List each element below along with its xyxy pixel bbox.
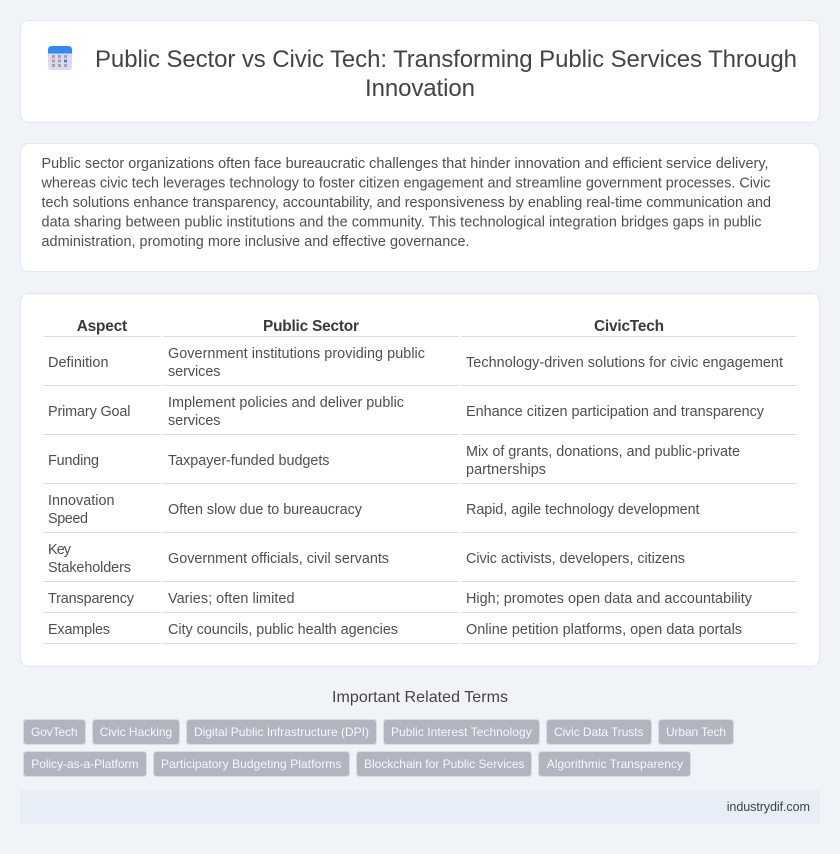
intro paragraph: data sharing between public institutions and the community. This technological integration bridges gaps in public	[42, 214, 762, 230]
row: Key Stakeholders: Stakeholders	[48, 560, 131, 576]
panel: introduction text	[20, 144, 820, 272]
tag: Urban Tech: Urban Tech	[666, 725, 726, 739]
panel: comparison table	[20, 294, 820, 666]
tag: Civic Data Trusts	[546, 720, 652, 744]
tag: Digital Public Infrastructure: Digital Public Infrastructure (DPI)	[194, 725, 369, 739]
table header row	[43, 318, 797, 337]
intro paragraph: tech solutions enhance transparency, accountability, and responsiveness by enabling real-time communication and	[42, 195, 771, 211]
row: Innovation Speed: Speed	[48, 511, 88, 527]
heading: related terms: Important Related Terms	[332, 689, 508, 706]
tag: Public Interest Technology	[384, 720, 540, 744]
tag: GovTech: GovTech	[31, 725, 78, 739]
row: Key Stakeholders: Government officials, civil servants	[168, 551, 389, 567]
tag: Policy-as-a-Platform	[24, 752, 146, 776]
row: Innovation Speed: Rapid, agile technology development	[466, 502, 700, 518]
table header row: Public Sector	[263, 318, 359, 335]
row: Primary Goal: services	[168, 413, 220, 429]
title	[95, 46, 797, 102]
tag: Civic Data Trusts: Civic Data Trusts	[554, 725, 644, 739]
row: Examples	[43, 622, 797, 644]
row: Definition: Government institutions providing public	[168, 346, 425, 362]
intro paragraph: administration, promoting more inclusive and effective governance.	[42, 234, 470, 250]
intro paragraph: Public sector organizations often face bureaucratic challenges that hinder innovation and efficient service delivery,	[42, 156, 768, 172]
footer source text: industrydif.com	[727, 800, 810, 814]
row: Funding: partnerships	[466, 462, 546, 478]
row: Primary Goal: Primary Goal	[48, 404, 130, 420]
row: Examples: City councils, public health agencies	[168, 622, 398, 638]
row: Funding	[43, 444, 797, 484]
tag: Blockchain for Public Services: Blockchain for Public Services	[364, 757, 524, 771]
row: Definition: Definition	[48, 355, 108, 371]
tag: Policy-as-a-Platform: Policy-as-a-Platform	[31, 757, 138, 771]
tag: Digital Public Infrastructure	[186, 720, 376, 744]
row: Transparency: Varies; often limited	[168, 591, 294, 607]
row: Definition	[43, 346, 797, 386]
table header row: Aspect	[77, 318, 127, 335]
row: Funding: Funding	[48, 453, 99, 469]
row: Key Stakeholders	[43, 542, 797, 582]
row: Primary Goal: Enhance citizen participation and transparency	[466, 404, 765, 420]
row: Transparency: High; promotes open data and accountability	[466, 591, 753, 607]
row: Definition: services	[168, 364, 220, 380]
title: Public Sector vs Civic Tech: Transforming Public Services Through	[95, 46, 797, 73]
panel: title header	[20, 20, 820, 122]
row: Innovation Speed: Innovation	[48, 493, 114, 509]
tag: Civic Hacking: Civic Hacking	[100, 725, 172, 739]
row: Transparency: Transparency	[48, 591, 135, 607]
tag: Participatory Budgeting Platforms: Participatory Budgeting Platforms	[161, 757, 342, 771]
title: Innovation	[365, 75, 475, 102]
footer bar	[20, 790, 820, 824]
row: Examples: Examples	[48, 622, 110, 638]
row: Transparency	[43, 591, 797, 613]
row: Primary Goal	[43, 395, 797, 435]
row: Examples: Online petition platforms, open data portals	[466, 622, 742, 638]
intro paragraph	[40, 156, 771, 250]
row: Innovation Speed	[43, 493, 797, 533]
tag: Participatory Budgeting Platforms	[154, 752, 350, 776]
icon: calendar app	[48, 46, 72, 70]
row: Funding: Mix of grants, donations, and public-private	[466, 444, 740, 460]
table header row: CivicTech	[594, 318, 664, 335]
row: Funding: Taxpayer-funded budgets	[168, 453, 330, 469]
tag: Blockchain for Public Services	[356, 752, 532, 776]
tag: Algorithmic Transparency: Algorithmic Transparency	[547, 757, 683, 771]
tag: Public Interest Technology: Public Interest Technology	[391, 725, 532, 739]
row: Key Stakeholders: Key	[48, 542, 72, 558]
row: Key Stakeholders: Civic activists, developers, citizens	[466, 551, 685, 567]
tag: GovTech	[24, 720, 86, 744]
tag: Civic Hacking	[92, 720, 180, 744]
row: Innovation Speed: Often slow due to bureaucracy	[168, 502, 363, 518]
row: Definition: Technology-driven solutions for civic engagement	[466, 355, 783, 371]
tag: Algorithmic Transparency	[538, 752, 690, 776]
intro paragraph: whereas civic tech leverages technology to foster citizen engagement and streamline government processes. Civic	[40, 176, 770, 192]
tag: Urban Tech	[658, 720, 734, 744]
tag list: related terms	[24, 720, 734, 776]
row: Primary Goal: Implement policies and deliver public	[168, 395, 404, 411]
